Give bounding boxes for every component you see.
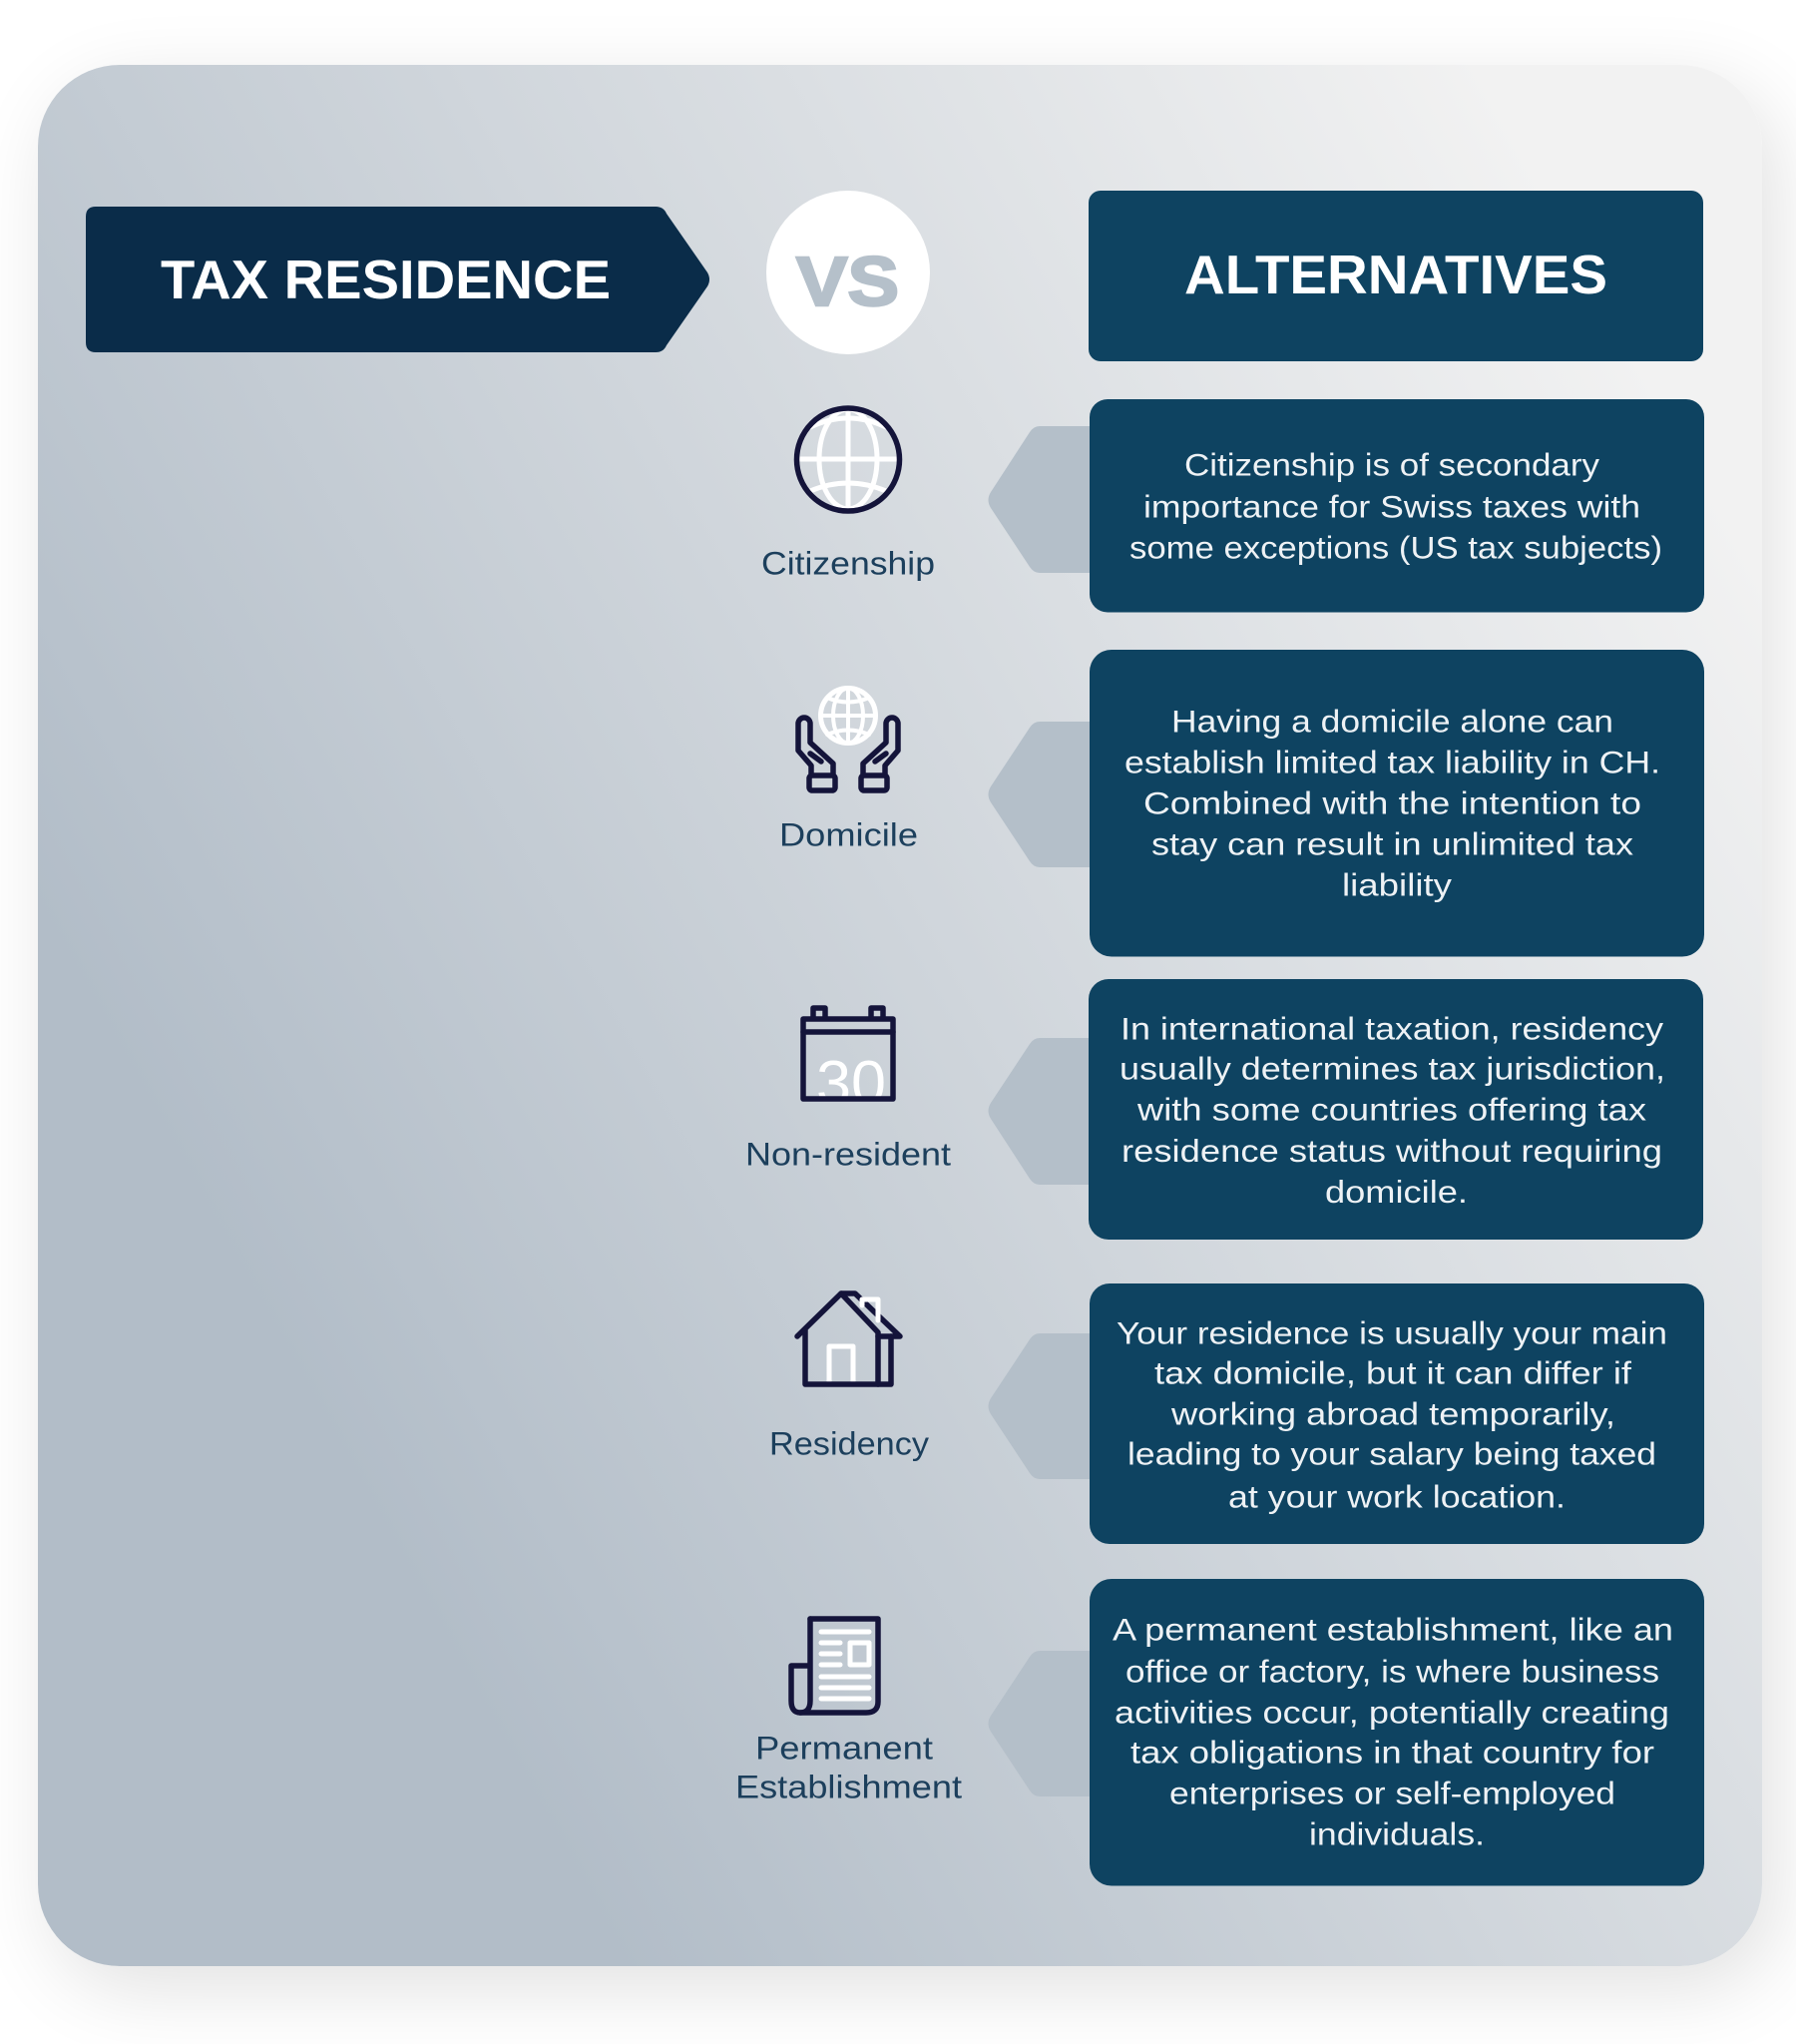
label: permanent establishment: Establishment bbox=[735, 1770, 962, 1805]
text block: citizenship description bbox=[1090, 399, 1704, 613]
text block: permanent establishment description: A permanent establishment, like an bbox=[1113, 1611, 1673, 1647]
text block: domicile description: establish limited tax liability in CH. bbox=[1124, 745, 1660, 780]
text block: domicile description: Having a domicile alone can bbox=[1171, 703, 1613, 739]
text block: non-resident description bbox=[1089, 979, 1703, 1240]
heading: alternatives: ALTERNATIVES bbox=[1184, 244, 1607, 305]
row: domicile bbox=[779, 650, 1704, 956]
label: residency: Residency bbox=[769, 1426, 929, 1462]
arrow: citizenship bbox=[988, 426, 1090, 573]
icon: calendar: 30 bbox=[816, 1049, 886, 1118]
label: domicile: Domicile bbox=[779, 817, 918, 853]
text block: domicile description bbox=[1090, 650, 1704, 956]
text block: residency description bbox=[1090, 1283, 1704, 1544]
text block: citizenship description: Citizenship is of secondary bbox=[1184, 447, 1599, 483]
arrow: permanent establishment bbox=[988, 1651, 1090, 1796]
text block: residency description: at your work location. bbox=[1228, 1479, 1566, 1515]
text block: non-resident description: domicile. bbox=[1325, 1174, 1468, 1210]
text block: residency description: leading to your salary being taxed bbox=[1127, 1435, 1656, 1471]
text block: non-resident description: usually determines tax jurisdiction, bbox=[1120, 1050, 1665, 1086]
row: non-resident bbox=[745, 979, 1703, 1240]
text block: citizenship description: some exceptions (US tax subjects) bbox=[1129, 529, 1662, 565]
text block: permanent establishment description: individuals. bbox=[1309, 1816, 1485, 1852]
row: citizenship bbox=[761, 399, 1704, 613]
row: residency bbox=[769, 1283, 1704, 1544]
text block: citizenship description: importance for Swiss taxes with bbox=[1143, 489, 1640, 525]
icon: house bbox=[797, 1293, 900, 1384]
text block: residency description: Your residence is usually your main bbox=[1117, 1315, 1667, 1351]
arrow: domicile bbox=[988, 722, 1090, 867]
icon: newspaper document bbox=[791, 1619, 878, 1713]
text block: non-resident description: residence status without requiring bbox=[1122, 1133, 1662, 1169]
icon: calendar bbox=[803, 1008, 893, 1118]
label: citizenship: Citizenship bbox=[761, 546, 935, 582]
text block: domicile description: Combined with the intention to bbox=[1143, 784, 1641, 820]
icon: globe bbox=[796, 408, 900, 511]
label: permanent establishment bbox=[735, 1731, 962, 1805]
text block: residency description: tax domicile, but it can differ if bbox=[1154, 1355, 1631, 1391]
text block: permanent establishment description: tax obligations in that country for bbox=[1130, 1735, 1654, 1771]
text block: residency description: working abroad temporarily, bbox=[1170, 1395, 1615, 1431]
row: permanent establishment bbox=[735, 1579, 1704, 1886]
text block: permanent establishment description: activities occur, potentially creating bbox=[1115, 1695, 1669, 1731]
label: non-resident: Non-resident bbox=[745, 1137, 951, 1173]
icon: hands holding globe bbox=[798, 689, 898, 790]
vs badge bbox=[766, 191, 930, 354]
heading: tax residence banner: TAX RESIDENCE bbox=[161, 249, 611, 310]
heading: tax residence banner bbox=[86, 207, 709, 352]
heading: alternatives bbox=[1089, 191, 1703, 361]
text block: domicile description: liability bbox=[1342, 866, 1452, 902]
label: permanent establishment: Permanent bbox=[755, 1731, 933, 1767]
text block: permanent establishment description bbox=[1090, 1579, 1704, 1886]
text block: domicile description: stay can result in unlimited tax bbox=[1151, 826, 1633, 862]
vs badge: VS bbox=[796, 243, 899, 320]
arrow: non-resident bbox=[988, 1038, 1089, 1185]
text block: permanent establishment description: enterprises or self-employed bbox=[1169, 1775, 1615, 1810]
text block: non-resident description: In international taxation, residency bbox=[1121, 1010, 1663, 1046]
text block: non-resident description: with some countries offering tax bbox=[1136, 1092, 1646, 1128]
text block: permanent establishment description: office or factory, is where business bbox=[1125, 1653, 1659, 1689]
arrow: residency bbox=[988, 1333, 1090, 1479]
